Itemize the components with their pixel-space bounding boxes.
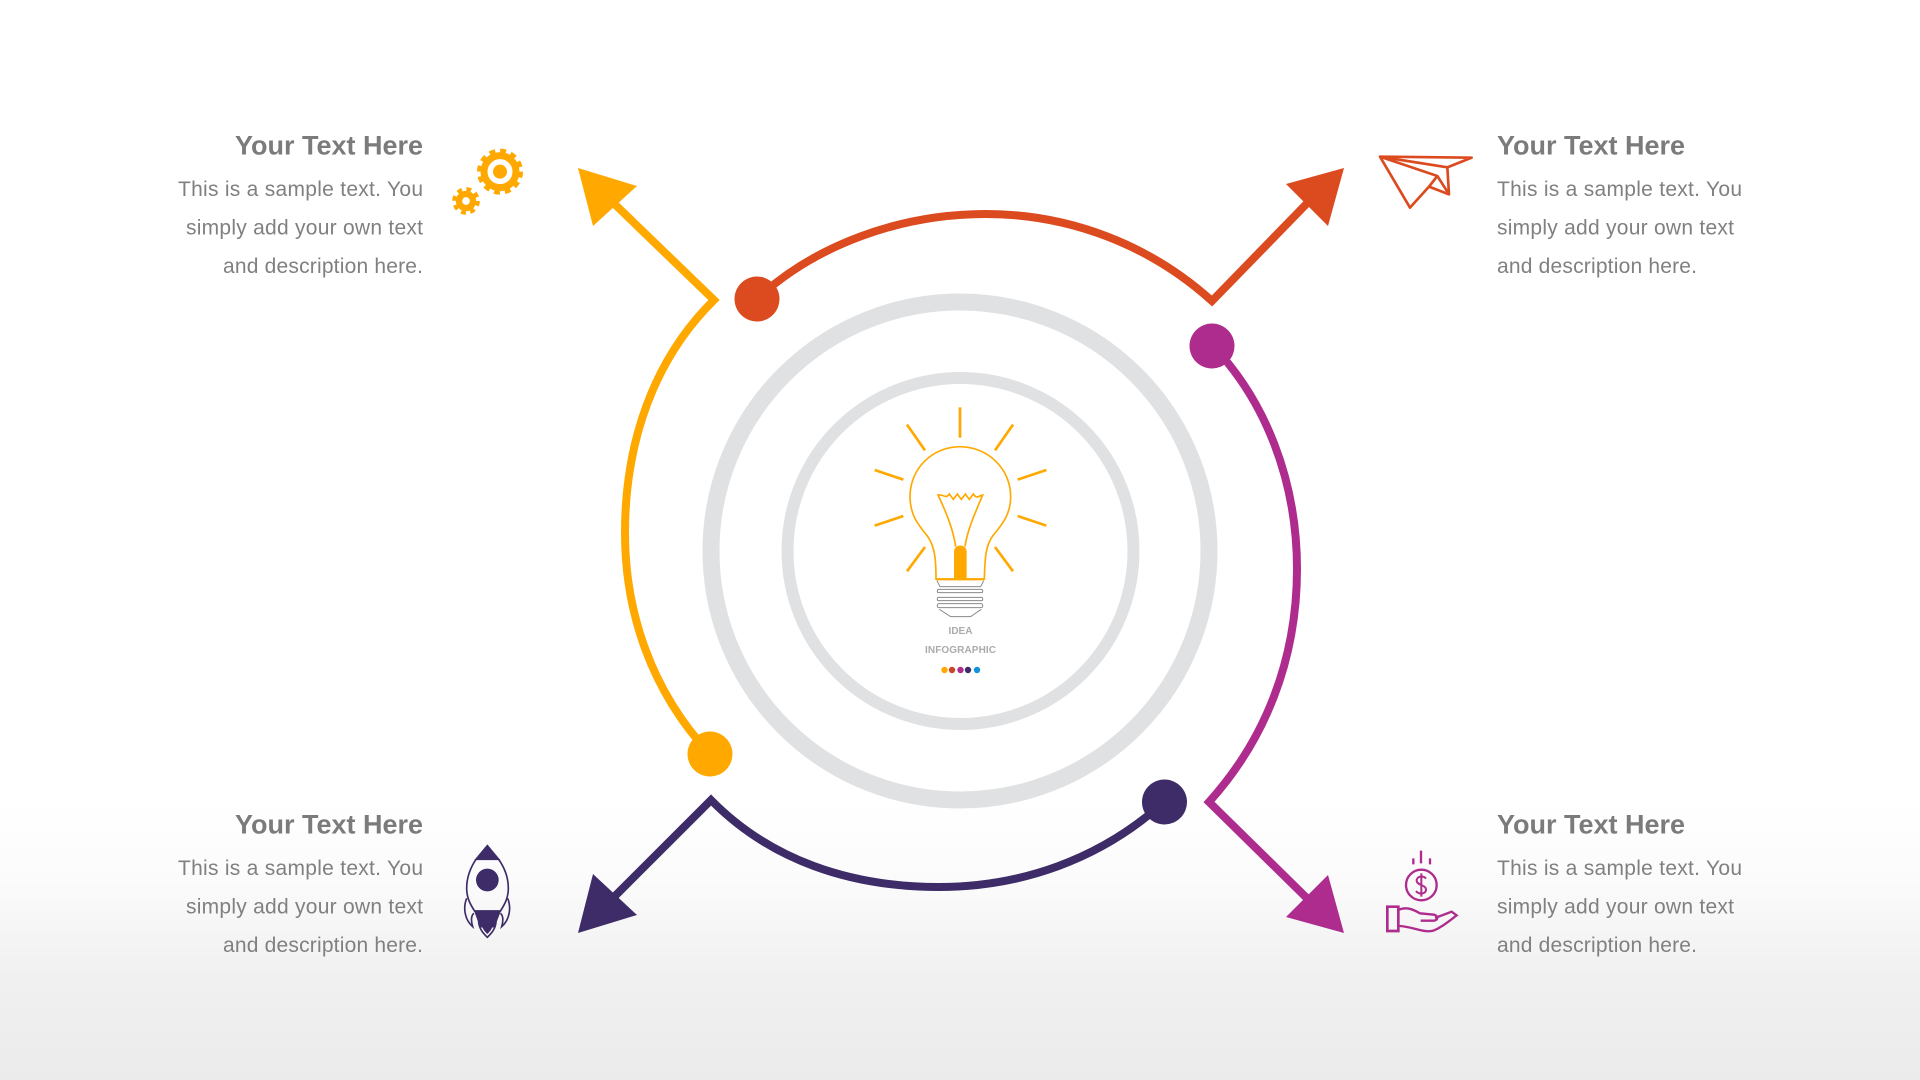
panel: bottom left text: Your Text Here <box>235 810 423 840</box>
panel: bottom right text <box>1497 810 1742 957</box>
panel: bottom left text <box>178 810 423 957</box>
panel: bottom left text: simply add your own text <box>186 896 423 918</box>
panel: bottom left text: and description here. <box>223 934 423 957</box>
icon: light bulb <box>875 407 1046 617</box>
panel: top left text: Your Text Here <box>235 130 423 160</box>
panel: top left text: This is a sample text. You <box>178 178 423 201</box>
panel: top left text: simply add your own text <box>186 216 423 240</box>
panel: top right text: Your Text Here <box>1497 130 1685 160</box>
icon: gears <box>455 152 520 212</box>
panel: bottom right text: This is a sample text. You <box>1497 857 1742 880</box>
center label <box>925 626 996 656</box>
center label: IDEA <box>949 626 972 637</box>
concentric rings <box>711 302 1209 800</box>
panel: bottom right text: Your Text Here <box>1497 810 1685 840</box>
panel: top right text: simply add your own text <box>1497 216 1734 240</box>
panel: top left text <box>178 130 423 278</box>
icon: paper plane <box>1380 157 1472 208</box>
panel: bottom left text: This is a sample text. You <box>178 857 423 880</box>
panel: bottom right text: and description here. <box>1497 934 1697 957</box>
arrow: orange <box>578 168 732 776</box>
icon: hand holding coin <box>1387 851 1457 931</box>
panel: top right text: and description here. <box>1497 255 1697 278</box>
arrow: navy <box>578 780 1187 933</box>
center label: INFOGRAPHIC <box>925 645 996 656</box>
color dots <box>941 667 980 673</box>
panel: bottom right text: simply add your own text <box>1497 896 1734 918</box>
panel: top right text <box>1497 130 1742 278</box>
arrow: purple <box>1190 324 1344 933</box>
panel: top right text: This is a sample text. You <box>1497 178 1742 201</box>
icon: rocket <box>465 846 510 937</box>
panel: top left text: and description here. <box>223 255 423 278</box>
arrow: red <box>734 168 1344 322</box>
